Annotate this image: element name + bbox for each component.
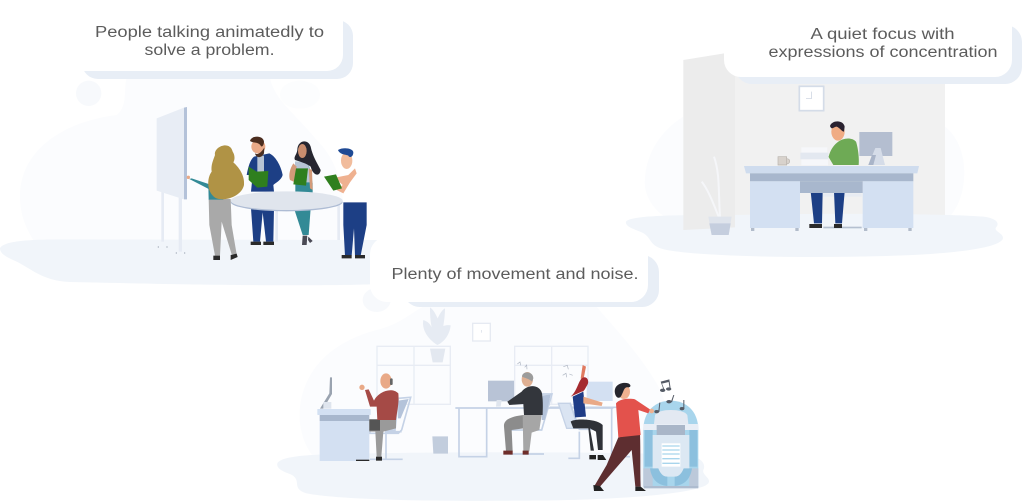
caption: plenty of movement: Plenty of movement and noise. [392, 266, 638, 283]
jukebox [643, 401, 698, 488]
speech bubble shadow [403, 255, 659, 307]
background blob [300, 303, 670, 460]
speech bubble [370, 237, 648, 302]
panel: quiet focus [626, 4, 1022, 257]
scene: lively office with jukebox [277, 288, 709, 501]
background blob [20, 78, 344, 240]
background blob [645, 117, 964, 220]
scene: man working at a desk [626, 52, 1003, 257]
floor [626, 214, 1003, 257]
person: woman in red dancing [593, 383, 654, 491]
stack of papers [800, 147, 828, 165]
monitor on middle desk [488, 381, 514, 407]
scene: collaborative team at whiteboard [0, 78, 378, 285]
caption: expressions of concentration: expressions of concentration [768, 44, 998, 61]
caption: people talking: People talking animatedly to [95, 24, 324, 41]
computer monitor [859, 132, 892, 165]
music notes above jukebox [654, 379, 684, 413]
floor [0, 239, 378, 285]
whiteboard [157, 107, 187, 254]
panel: movement and noise [277, 237, 709, 501]
person: woman with golden hair pointing at board [187, 145, 244, 260]
person: man with blue hair reading [324, 148, 367, 258]
round table [231, 191, 343, 242]
side wall [683, 52, 735, 230]
speech bubble [724, 4, 1012, 77]
coffee mug [778, 157, 790, 165]
floor [277, 452, 709, 501]
caption: a quiet focus: A quiet focus with [810, 26, 954, 43]
caption: solve a problem: solve a problem. [144, 42, 274, 59]
speech bubble shadow [82, 20, 353, 79]
person: bald man in red sweater on chair [359, 373, 411, 461]
waste bin [432, 436, 448, 454]
potted plant [702, 157, 732, 235]
person: woman with long dark hair [289, 141, 321, 245]
person: man with beard in blue jacket [247, 137, 283, 245]
person: man in green sweater [809, 121, 862, 228]
plant in pot on window [423, 307, 451, 362]
team figures and table [187, 137, 367, 260]
person: grey haired man in black sweater [503, 372, 552, 455]
decorative circle [363, 288, 391, 312]
back wall [735, 67, 945, 217]
music notes by monitor [517, 362, 573, 377]
wall clock [473, 323, 490, 341]
left window [377, 346, 450, 404]
jukebox corner area [550, 365, 698, 491]
right window [515, 346, 588, 404]
desk [744, 166, 919, 231]
left desk with computer [317, 377, 371, 461]
panel: people talking animatedly [0, 0, 378, 285]
decorative circles [76, 81, 320, 109]
middle desk [455, 408, 613, 457]
speech bubble [55, 0, 343, 71]
speech bubble shadow [735, 25, 1022, 84]
person: red haired woman stretching [550, 365, 630, 460]
wall clock [799, 86, 824, 111]
